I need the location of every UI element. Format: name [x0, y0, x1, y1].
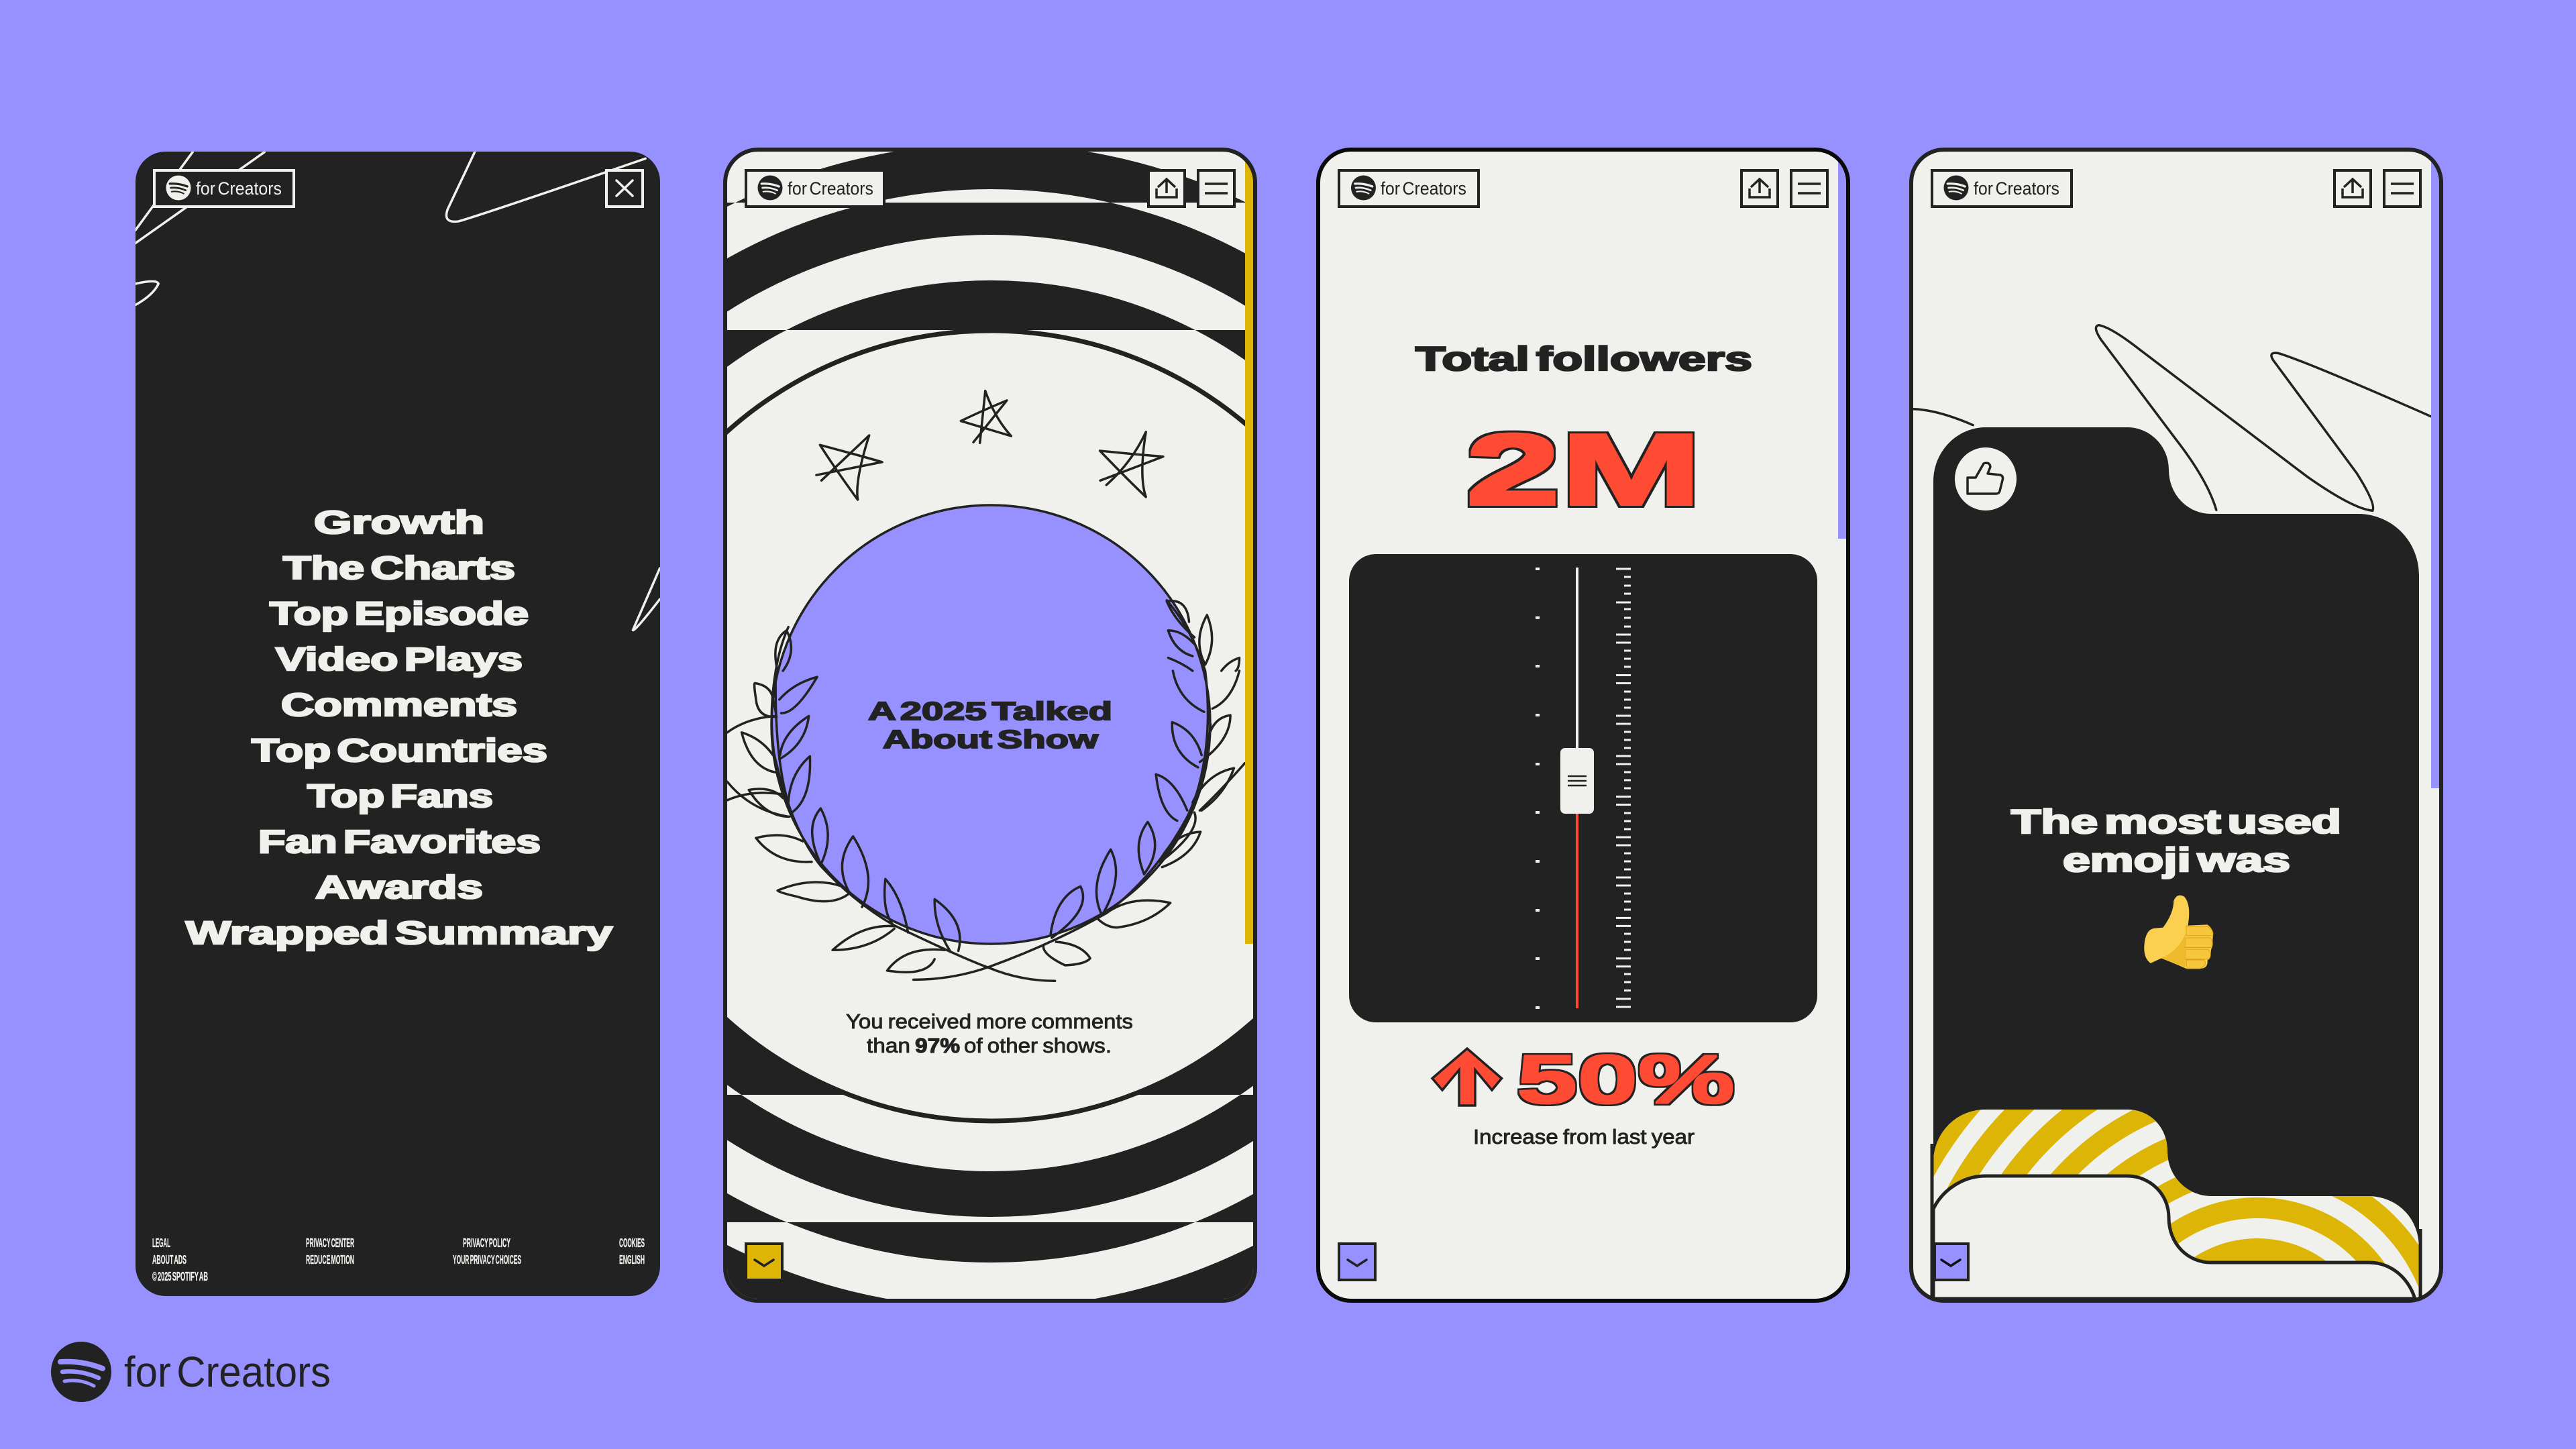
footer links: YOUR PRIVACY CHOICES	[453, 1253, 521, 1267]
footer links: PRIVACY POLICY	[463, 1236, 511, 1250]
scroll bar	[1245, 152, 1253, 944]
panel outline	[1318, 150, 1848, 1301]
icon: down button	[746, 1244, 782, 1280]
panel outline	[725, 150, 1255, 1301]
text: comments comparison	[846, 1010, 1133, 1057]
scroll bar	[2431, 152, 2439, 788]
icon: menu	[1198, 170, 1234, 207]
footer links: LEGAL	[152, 1236, 170, 1250]
menu list: Top Episode	[270, 596, 529, 632]
icon: up arrow	[1432, 1049, 1501, 1106]
footer links: © 2025 SPOTIFY AB	[152, 1270, 208, 1283]
panel: menu screen: ENGLISH	[619, 1253, 645, 1267]
slider chart	[1349, 554, 1817, 1022]
slider track	[1576, 568, 1578, 748]
panel: menu screen	[136, 152, 660, 1296]
stat: 50%: 50%	[1517, 1041, 1735, 1118]
panel: most used emoji	[1909, 148, 2443, 1303]
brand logo: spotify for creators	[51, 1342, 331, 1402]
logo box	[1932, 170, 2072, 207]
decorative scribble lines	[136, 152, 660, 630]
striped folder tab	[1931, 1110, 2422, 1297]
heading: the most used emoji was: The most used	[2011, 803, 2341, 841]
big number: 2M: 2M	[1466, 415, 1702, 525]
text: increase from last year: Increase from last year	[1473, 1125, 1695, 1148]
icon: menu	[2384, 170, 2420, 207]
logo box: for Creators	[1381, 178, 1466, 199]
icon: down button	[1935, 1244, 1968, 1280]
slider knob	[1560, 748, 1594, 814]
heading: a 2025 talked about show: About Show	[883, 726, 1099, 754]
menu list: The Charts	[283, 551, 515, 586]
dark card	[1933, 427, 2419, 1299]
text: comments comparison: 97%	[915, 1034, 960, 1057]
icon: menu	[1791, 170, 1827, 207]
logo box	[1339, 170, 1479, 207]
text: comments comparison: than	[867, 1034, 910, 1057]
icon: share	[1148, 170, 1185, 207]
panel: talked about show	[723, 148, 1257, 1303]
menu list: Growth	[314, 505, 484, 541]
footer links: ABOUT ADS	[152, 1253, 186, 1267]
panel outline	[1911, 150, 2441, 1301]
cream front tab	[1933, 1176, 2415, 1299]
laurel wreath	[727, 600, 1245, 981]
left scale ticks	[1536, 569, 1540, 1008]
heading: the most used emoji was	[2011, 803, 2341, 879]
logo box	[154, 170, 294, 207]
menu list: Video Plays	[276, 642, 523, 678]
icon: share	[2334, 170, 2371, 207]
decorative scribble lines	[1770, 152, 1838, 197]
icon: close button	[606, 170, 643, 207]
heading: total followers: Total followers	[1415, 340, 1752, 378]
icon: share	[1741, 170, 1778, 207]
slider value	[1576, 813, 1578, 1008]
menu list	[186, 505, 612, 951]
panel: total followers	[1318, 150, 1848, 1301]
text: comments comparison: You received more comments	[846, 1010, 1133, 1033]
menu list: Top Fans	[307, 779, 493, 814]
logo box: for Creators	[196, 178, 282, 199]
menu list: Fan Favorites	[258, 824, 541, 860]
footer links	[152, 1236, 645, 1283]
panel: menu screen: COOKIES	[619, 1236, 645, 1250]
icon: thumbs-up badge	[1955, 447, 2017, 511]
logo box: for Creators	[1974, 178, 2059, 199]
menu list: Top Countries	[252, 733, 547, 769]
footer links: PRIVACY CENTER	[306, 1236, 354, 1250]
heading: the most used emoji was: emoji was	[2063, 841, 2290, 879]
heading: a 2025 talked about show: A 2025 Talked	[868, 698, 1112, 726]
menu list: Comments	[281, 688, 517, 723]
icon: down button	[1339, 1244, 1375, 1280]
purple disc	[771, 505, 1210, 944]
logo box	[746, 170, 884, 207]
icon: thumbs-up emoji	[2144, 896, 2213, 969]
right scale ticks	[1616, 569, 1631, 1007]
logo box: for Creators	[788, 178, 873, 199]
heading: a 2025 talked about show	[868, 698, 1112, 754]
menu list: Awards	[315, 870, 483, 906]
brand logo: spotify for creators: for Creators	[124, 1348, 331, 1396]
icon: hand-drawn stars	[816, 391, 1163, 500]
text: comments comparison: of other shows.	[964, 1034, 1112, 1057]
decorative scribble lines	[1913, 325, 2431, 511]
scroll bar	[1838, 152, 1846, 539]
concentric rings background	[727, 152, 1253, 1299]
menu list: Wrapped Summary	[186, 916, 612, 951]
footer links: REDUCE MOTION	[306, 1253, 354, 1267]
